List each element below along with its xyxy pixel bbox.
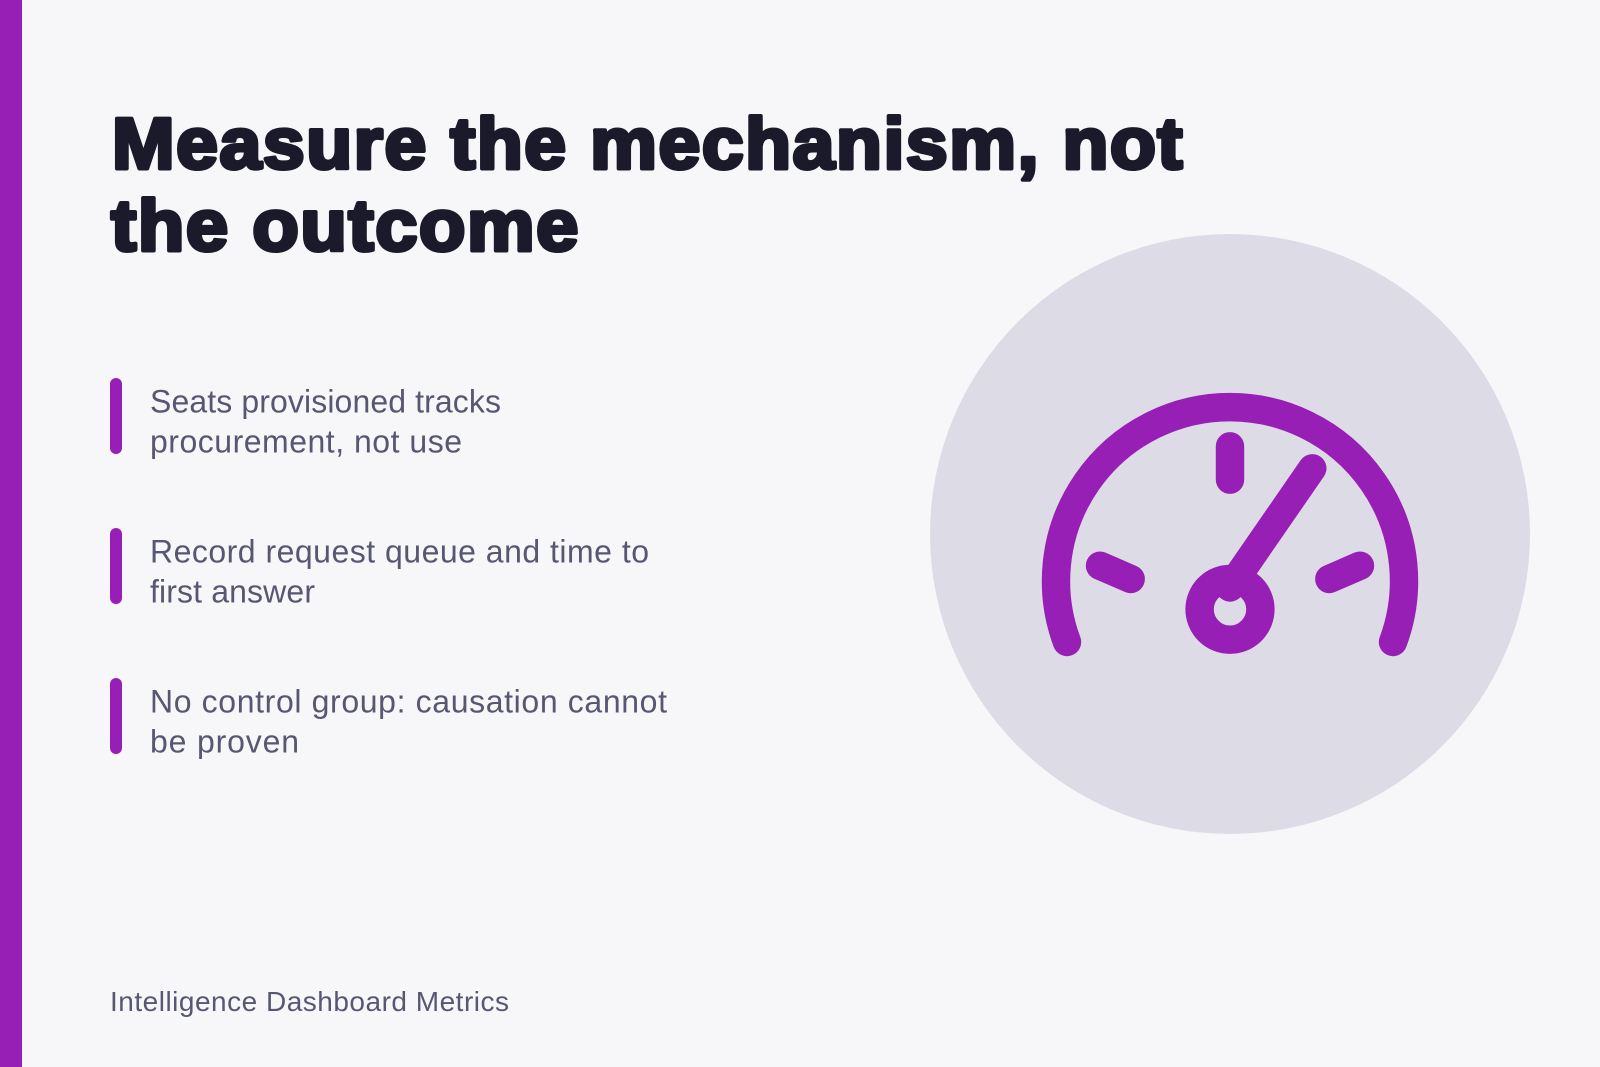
bullet 2: record request queue (110, 528, 649, 610)
gauge tick right (1329, 566, 1360, 579)
gauge tick top (1216, 446, 1244, 480)
icon: speedometer gauge (1056, 407, 1404, 642)
gauge tick left (1100, 566, 1131, 579)
bullet 3: no control group: No control group: causation cannot (150, 684, 667, 720)
bullet 2: record request queue: Record request queue and time to (150, 534, 649, 570)
title: Measure the mechanism, not (112, 104, 1184, 184)
gauge hub (1200, 579, 1260, 640)
bullet list (110, 378, 667, 760)
bullet 1: seats provisioned: Seats provisioned tracks (150, 384, 501, 420)
gauge arc (1056, 407, 1404, 642)
title: the outcome (111, 186, 580, 266)
bullet 1: seats provisioned: procurement, not use (150, 424, 462, 460)
footer label: Intelligence Dashboard Metrics (110, 986, 509, 1017)
bullet 3: no control group: be proven (150, 724, 299, 760)
accent sidebar (0, 0, 22, 1067)
gauge needle (1230, 468, 1312, 588)
bullet 3: no control group (110, 678, 667, 760)
icon backdrop circle (930, 234, 1530, 834)
bullet 2: record request queue: first answer (150, 574, 315, 610)
bullet 1: seats provisioned (110, 378, 501, 460)
title (111, 104, 1184, 266)
